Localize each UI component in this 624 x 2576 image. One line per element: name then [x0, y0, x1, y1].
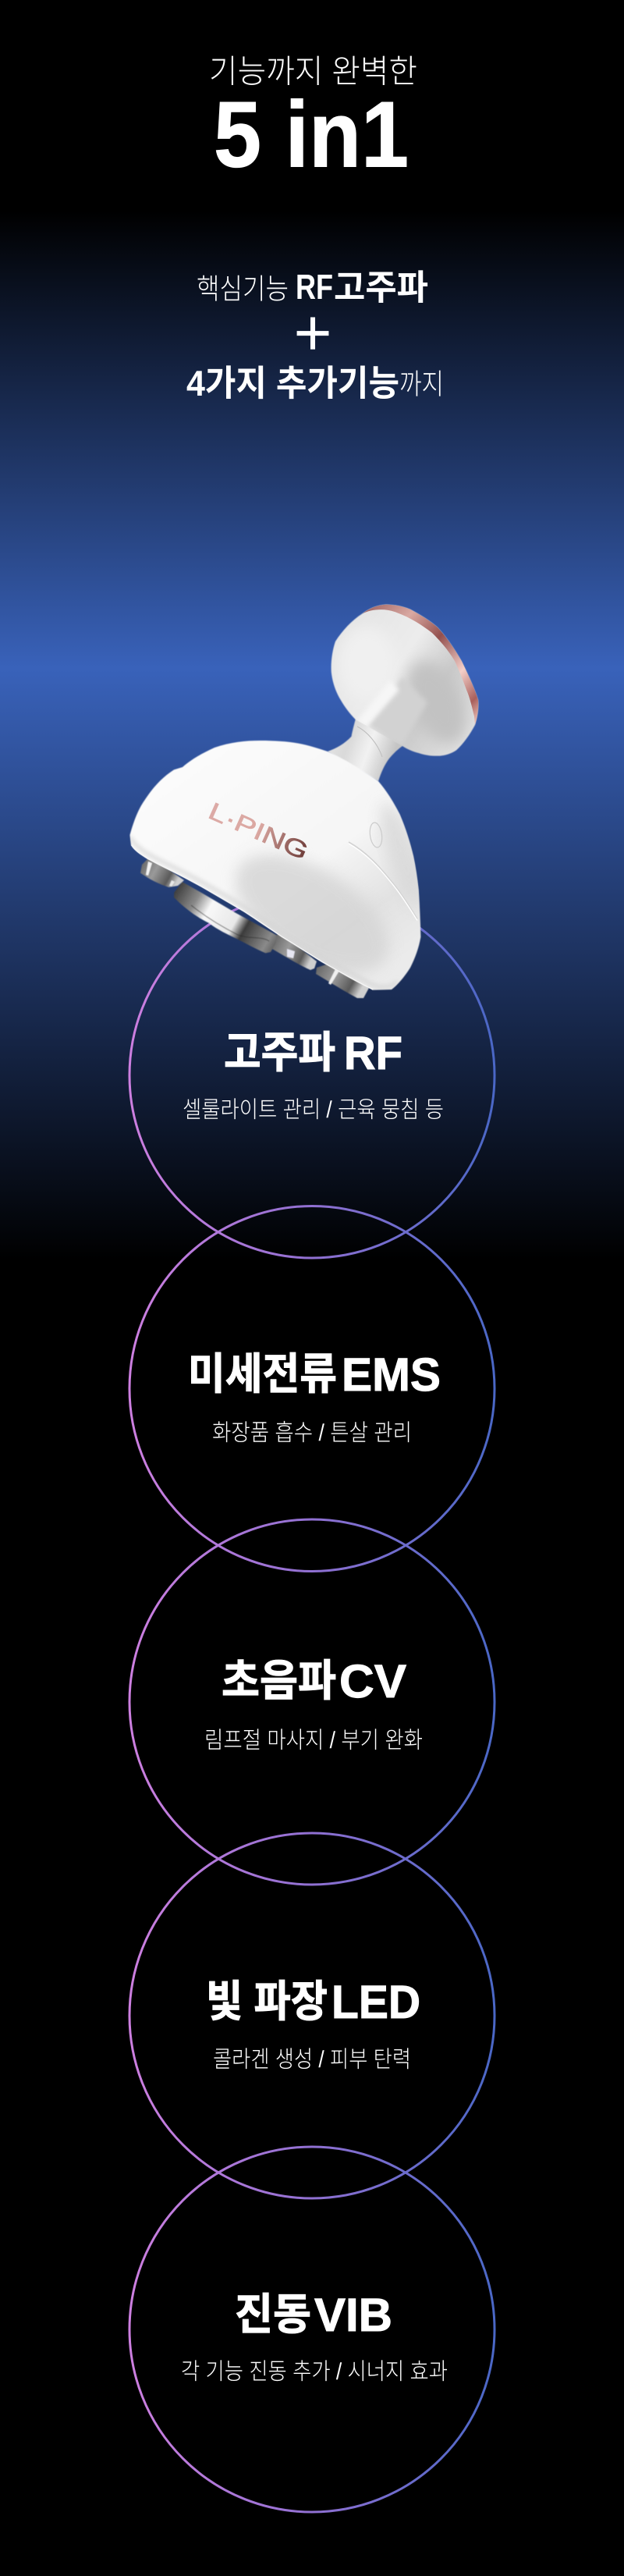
VIB heading: 진동: [235, 2290, 311, 2339]
LED description: 콜라겐 생성 / 피부 탄력: [213, 2047, 411, 2073]
panel text: RF: [183, 1027, 444, 1123]
title: 5 in1: 5 in1: [214, 83, 409, 187]
product: main body: [129, 741, 432, 995]
circle 3: CV: [129, 1519, 495, 1885]
VIB description: 각 기능 진동 추가 / 시너지 효과: [181, 2359, 448, 2385]
product: L-PING device: [129, 605, 478, 998]
product: power button: [368, 822, 384, 848]
circle 5: VIB: [129, 2147, 495, 2512]
panel text: CV: [204, 1655, 423, 1753]
heading line two: 4가지 추가기능: [186, 363, 399, 403]
EMS description: 화장품 흡수 / 튼살 관리: [212, 1420, 412, 1446]
CV heading: 초음파: [222, 1656, 336, 1705]
panel text: EMS: [188, 1348, 441, 1446]
panel text: LED: [206, 1976, 420, 2073]
product: head disc and neck: [328, 605, 478, 781]
heading line one: 고주파: [334, 268, 428, 307]
heading line one: [197, 267, 428, 307]
RF heading: 고주파: [224, 1028, 335, 1077]
RF heading: RF: [344, 1027, 402, 1079]
heading line two: 까지: [399, 368, 444, 400]
heading line one: 핵심기능: [197, 273, 289, 305]
title: subtitle line: 기능까지 완벽한: [209, 53, 417, 90]
RF heading: [224, 1027, 402, 1079]
CV description: 림프절 마사지 / 부기 완화: [204, 1728, 423, 1753]
title block: [209, 53, 417, 187]
EMS heading: 미세전류: [188, 1349, 337, 1398]
circle 1: RF: [129, 893, 495, 1258]
heading line one: RF: [296, 267, 333, 307]
plus sign: +: [293, 296, 332, 369]
circle 2: EMS: [129, 1206, 495, 1572]
panel text: VIB: [181, 2289, 448, 2385]
product: L-PING logo: L·PING: [204, 797, 313, 865]
CV heading: [222, 1655, 406, 1707]
heading: core function plus extras: [186, 267, 444, 403]
VIB heading: [235, 2289, 392, 2341]
circle 4: LED: [129, 1833, 495, 2198]
LED heading: LED: [332, 1976, 420, 2028]
EMS heading: EMS: [342, 1348, 441, 1401]
VIB heading: VIB: [314, 2289, 392, 2341]
LED heading: [206, 1976, 420, 2028]
LED heading: 빛 파장: [206, 1977, 328, 2026]
EMS heading: [188, 1348, 441, 1401]
CV heading: CV: [339, 1655, 406, 1707]
RF description: 셀룰라이트 관리 / 근육 뭉침 등: [183, 1097, 444, 1123]
product: metal electrodes: [140, 857, 369, 998]
